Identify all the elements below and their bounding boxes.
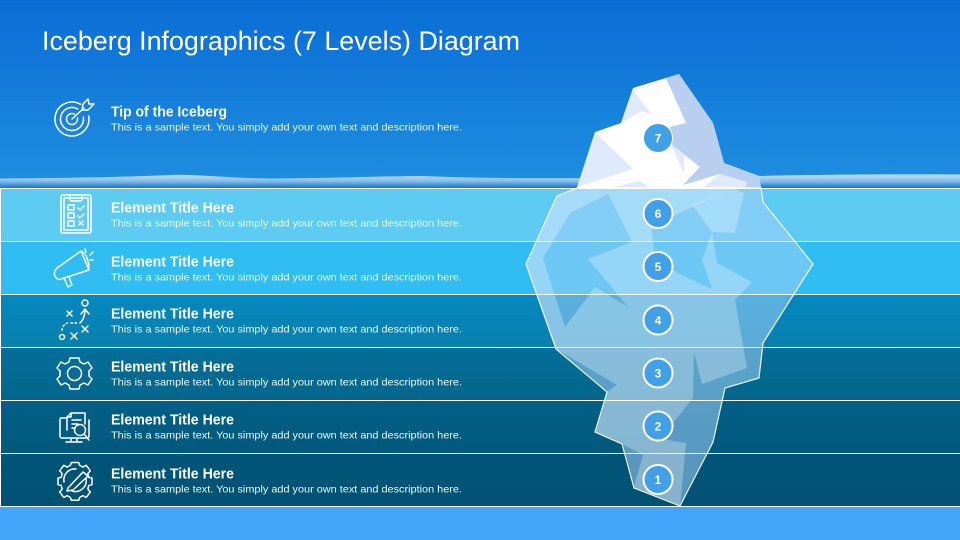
text: element 2: This is a sample text. You simply add your own text and description here. <box>111 430 462 442</box>
icon: target <box>55 99 94 136</box>
text: element 5: This is a sample text. You simply add your own text and description here. <box>111 272 462 284</box>
number badge 1 <box>644 465 672 494</box>
icon: gear with pencil <box>58 463 92 500</box>
text: element 6 <box>111 200 462 230</box>
water surface waves <box>0 174 960 188</box>
icon: megaphone <box>54 249 93 287</box>
number badge 2 <box>644 412 672 440</box>
text: tip of the iceberg: Tip of the Iceberg <box>111 104 227 120</box>
text: element 3: This is a sample text. You simply add your own text and description here. <box>111 376 462 388</box>
iceberg body under water <box>526 188 813 506</box>
number badge 4 <box>644 306 672 334</box>
icon: monitor with document and magnifier <box>60 413 89 442</box>
bottom strip <box>0 506 960 540</box>
text: element 4: Element Title Here <box>111 306 234 322</box>
text: element 2 <box>111 412 462 442</box>
background sky <box>0 0 960 188</box>
text: element 1 <box>111 466 462 496</box>
depth bands <box>0 188 960 506</box>
number badge 5: 5 <box>655 260 662 274</box>
number badge 3 <box>644 358 672 388</box>
number badge 4: 4 <box>655 314 662 328</box>
number badge 7: 7 <box>655 132 662 146</box>
icon: strategy play <box>60 300 89 340</box>
text: element 3: Element Title Here <box>111 358 234 376</box>
title: Iceberg Infographics (7 Levels) Diagram <box>42 26 520 56</box>
text: tip of the iceberg <box>111 104 462 134</box>
number badge 1: 1 <box>655 473 662 487</box>
icon: gear <box>57 358 92 389</box>
text: tip of the iceberg: This is a sample text. You simply add your own text and description here. <box>111 122 462 134</box>
text: element 5: Element Title Here <box>111 254 234 270</box>
number badge 2: 2 <box>655 420 662 434</box>
text: element 6: This is a sample text. You simply add your own text and description here. <box>111 218 462 230</box>
icon: clipboard checklist <box>61 195 91 233</box>
text: element 6: Element Title Here <box>111 200 234 216</box>
number badge 7 <box>644 124 672 152</box>
iceberg <box>526 74 813 506</box>
text: element 1: This is a sample text. You simply add your own text and description here. <box>111 484 462 496</box>
text: element 4 <box>111 306 462 336</box>
number badge 6 <box>644 199 672 228</box>
number badge 6: 6 <box>655 207 662 221</box>
number badge 3: 3 <box>655 366 662 380</box>
band lines over iceberg <box>0 188 960 506</box>
text: element 4: This is a sample text. You simply add your own text and description here. <box>111 324 462 336</box>
text: element 5 <box>111 254 462 284</box>
text: element 1: Element Title Here <box>111 466 234 482</box>
iceberg tip above water <box>577 74 761 188</box>
text: element 3 <box>111 358 462 388</box>
text: element 2: Element Title Here <box>111 412 234 428</box>
number badge 5 <box>644 252 672 281</box>
